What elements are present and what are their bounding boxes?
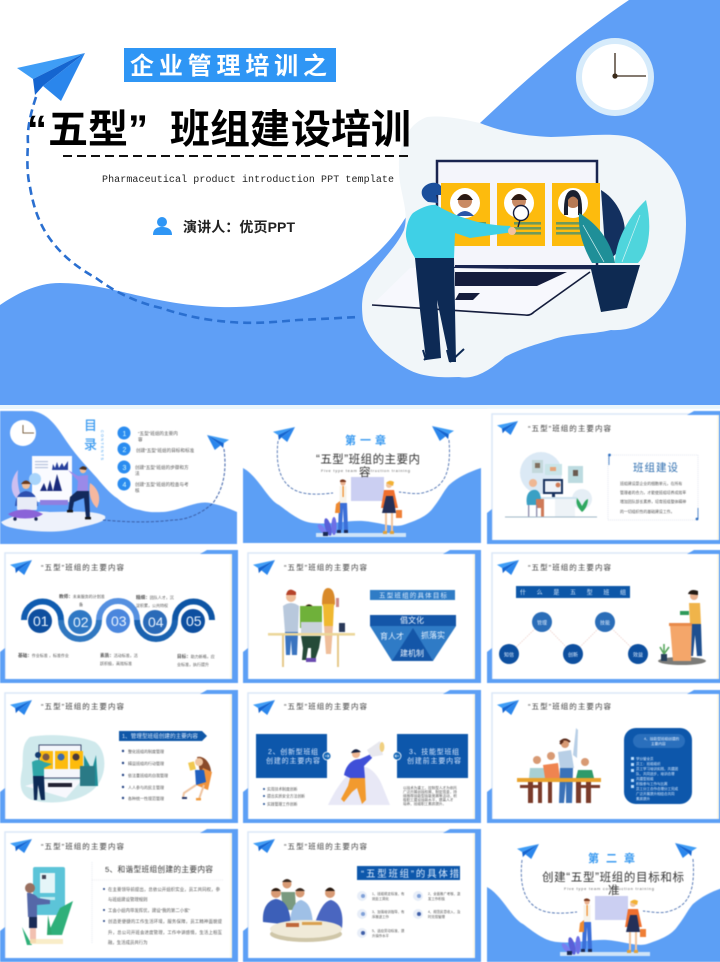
blue info card: 学分管全员 xyxy=(636,756,654,761)
text card: 管理者的合力，才能使班组培养成效率 xyxy=(620,490,686,495)
bullet list: 各种统一性规范管理 xyxy=(128,795,164,801)
right blue box: 创建前主要内容 xyxy=(407,756,461,765)
chapter heading: 创建“五型”班组的目标和标 xyxy=(542,870,684,884)
bullet list: 人人参与的民主管理 xyxy=(128,784,164,790)
contents list: 创建“五型”班组的步骤和方 xyxy=(135,464,189,471)
bullet paragraph xyxy=(103,886,223,946)
dashed flight path xyxy=(27,97,358,323)
bullet paragraph: 工会小组内带发挥优，建设“我的第二小家” xyxy=(108,907,190,914)
plane icon xyxy=(497,560,519,575)
ribbon chart: 01 xyxy=(33,613,49,629)
network diagram: 创新 xyxy=(568,652,578,658)
chapter heading: Five type team construction training xyxy=(321,468,410,473)
network diagram: 效益 xyxy=(633,652,643,658)
panel: harmony-type slide xyxy=(0,827,238,962)
chapter heading: Five type team construction training xyxy=(564,886,654,891)
text card: 班组建设 xyxy=(633,461,679,474)
goal funnel: 建机制 xyxy=(400,648,424,658)
heading: 目录: 目 xyxy=(84,418,97,433)
ribbon chart: 05 xyxy=(186,613,202,629)
text card: 增加团队部长素养，培育班组整体精神 xyxy=(620,499,686,504)
chapter heading: “五型”班组的主要内 xyxy=(316,452,420,466)
slide title: “五型”班组的主要内容 xyxy=(528,423,612,433)
bullet paragraph: 融，生活成员共行为 xyxy=(108,939,148,946)
contents list: 2 xyxy=(122,447,126,454)
blue info card: 队，共同进步，培训合理 xyxy=(636,771,675,776)
blue info card: 员工分工合作合理分工完成 xyxy=(636,786,678,791)
text card xyxy=(608,454,698,520)
chapter heading xyxy=(542,870,684,897)
ribbon chart: 02 xyxy=(73,614,89,630)
left bullets: 提出实质安全方法创新 xyxy=(267,794,305,798)
chapter label: 第二章 xyxy=(588,851,642,865)
measure items: 4、规范民意收入，及 xyxy=(428,909,461,914)
title: “五型”班组建设培训 xyxy=(27,108,411,152)
slide title: “五型”班组的主要内容 xyxy=(284,562,368,572)
right plane xyxy=(432,426,454,441)
slide title: “五型”班组的主要内容 xyxy=(528,562,612,572)
slide title: “五型”班组的主要内容 xyxy=(284,841,368,851)
step labels: 素质：活动标准，活 xyxy=(100,652,138,659)
measure items: 2、全面推广考核，激 xyxy=(428,891,461,896)
illustration: meeting at round table xyxy=(263,879,342,942)
plane icon xyxy=(253,700,275,715)
bullet list: 精益班组的行动管理 xyxy=(128,760,164,766)
ribbon chart: 04 xyxy=(148,614,164,630)
chapter heading: 准 xyxy=(608,884,620,897)
dashed flight path xyxy=(103,449,225,522)
bullet paragraph: 升，总公司开班会进度管理，工作中讲感情，生活上相互 xyxy=(108,929,223,936)
plane icon xyxy=(10,839,32,853)
illustration: team at chart xyxy=(1,456,105,532)
panel: specific goals slide xyxy=(243,548,481,683)
english subtitle: Pharmaceutical product introduction PPT template xyxy=(102,174,394,186)
right paragraph: 极职工建设技能水平，提高人才 xyxy=(403,797,454,802)
divider line xyxy=(92,862,223,944)
clock xyxy=(576,38,654,116)
right blue box: 3、技能型班组 xyxy=(409,747,459,756)
illustration: man with megaphone xyxy=(328,741,390,805)
heading: 目录 xyxy=(84,418,104,461)
blue info card: 4、技能型班组创建的 xyxy=(644,736,680,741)
goal funnel: 倡文化 xyxy=(400,615,424,625)
step labels: 教师：未来服务的计划准 xyxy=(59,593,105,600)
blue info card xyxy=(624,728,692,804)
plane icon xyxy=(253,560,275,575)
blue info card: 员工学习培训实践，共建团 xyxy=(636,766,678,771)
right paragraph: 续推荐技能型技能竞赛等活动，积 xyxy=(403,793,457,798)
chapter label: 第一章 xyxy=(345,433,390,447)
banner arrow: 1、管理型班组创建的主要内容 xyxy=(122,732,198,740)
panel: chapter one slide xyxy=(243,426,481,543)
step labels: 精细：团队人才，沉 xyxy=(136,594,174,601)
right paragraph: 培养，班组职工素质提升。 xyxy=(403,801,446,806)
arrow right xyxy=(393,752,401,760)
plane icon xyxy=(497,421,518,435)
blue info card: 员工：班组组织 xyxy=(636,761,661,766)
contents list: “五型”班组的主要内 xyxy=(138,430,178,437)
panel: 班组建设 slide xyxy=(487,409,720,544)
illustration: potted plant xyxy=(579,190,649,312)
clock xyxy=(10,420,36,446)
measure items xyxy=(357,891,461,938)
contents list: 容 xyxy=(138,436,143,443)
title bar: 什 么 是 五 型 班 组 xyxy=(520,588,626,596)
title banner: “五型班组”的具体措 xyxy=(361,868,459,879)
plane icon xyxy=(10,560,32,575)
illustration: team review xyxy=(21,735,104,802)
illustration: monitor with cards xyxy=(372,161,600,315)
blue info card: 主要内容 xyxy=(651,741,666,746)
bullet list: 整化班组的制度管理 xyxy=(128,748,164,754)
plane icon xyxy=(253,839,275,853)
panel: chapter two slide xyxy=(487,843,720,962)
illustration: team at desk xyxy=(268,588,355,667)
goal funnel: 育人才 xyxy=(380,631,404,641)
contents list: 创建“五型”班组的检查与考 xyxy=(135,481,189,488)
panel: innovation and skills slide xyxy=(243,688,481,823)
illustration: team at table xyxy=(517,728,601,803)
presenter xyxy=(153,217,295,235)
paper plane xyxy=(207,435,229,450)
network diagram: 管理 xyxy=(537,620,547,626)
goal funnel: 抓落实 xyxy=(421,630,445,640)
text card: 的一切组织性的基础建设工作。 xyxy=(620,509,674,514)
panel: cover slide xyxy=(0,0,720,405)
step labels xyxy=(18,593,215,667)
illustration: office worker xyxy=(505,452,597,517)
left plane xyxy=(273,427,295,442)
network diagram: 技能 xyxy=(600,620,610,626)
bullet list: 依法重班组的自我管理 xyxy=(128,772,168,778)
chapter heading xyxy=(316,452,420,479)
step labels: 基础：作业标准 ，标准作业 xyxy=(18,652,69,659)
slide title: “五型”班组的主要内容 xyxy=(284,701,368,711)
right plane xyxy=(675,843,697,858)
bullet paragraph: 与班组建设管理规则 xyxy=(108,896,148,903)
panel: management-type slide xyxy=(0,688,238,823)
blue info card: 积极参与工作与比赛 xyxy=(636,781,668,786)
pale blob behind illustration xyxy=(362,117,686,378)
step labels: 目标：助力新格，应 xyxy=(177,653,215,660)
heading: 目录: CONTENTS xyxy=(100,430,104,461)
right paragraph xyxy=(403,785,457,806)
left blue box: 创建的主要内容 xyxy=(266,756,320,765)
panel: five-step ribbon slide xyxy=(0,548,238,683)
left blue box: 2、创新型班组 xyxy=(268,747,318,756)
contents list: 3 xyxy=(122,465,126,472)
measure items: 1、班组规定标准，有 xyxy=(372,891,405,896)
paper plane xyxy=(17,53,85,101)
contents list: 核 xyxy=(135,487,140,494)
ribbon chart xyxy=(24,601,212,639)
contents list: 4 xyxy=(122,482,126,489)
banner: subtitle tag: 企业管理培训之 xyxy=(130,52,327,80)
ribbon chart: 03 xyxy=(111,613,127,629)
arrow left xyxy=(323,752,331,760)
slide title: “五型”班组的主要内容 xyxy=(41,562,124,572)
left blue box xyxy=(256,734,327,778)
illustration: woman reading xyxy=(182,757,212,800)
step labels: 业标准，执行提升 xyxy=(177,661,209,667)
measure items: 升操作水平 xyxy=(372,933,390,938)
left bullets: 实践管理工作创新 xyxy=(267,802,298,806)
left bullets xyxy=(263,786,305,806)
illustration: speaker at podium xyxy=(658,590,706,665)
slide title: “五型”班组的主要内容 xyxy=(41,701,124,711)
step labels: 跃积极，高效标准 xyxy=(100,660,132,666)
step labels: 备 xyxy=(79,601,83,607)
blue info card: 广泛开展提升相结合共同 xyxy=(636,791,675,796)
measure items: 序推进工作 xyxy=(372,914,390,919)
heading: 5、和谐型班组创建的主要内容 xyxy=(105,864,213,874)
contents list: 法 xyxy=(135,470,140,477)
title bar xyxy=(516,586,630,598)
bullet list xyxy=(122,748,168,801)
title underline xyxy=(63,155,412,157)
goal title bar: 五型班组的具体目标 xyxy=(379,590,448,600)
plane icon xyxy=(497,700,519,715)
illustration: woman at tablet xyxy=(22,867,73,945)
step labels: 淀积累，公共特权 xyxy=(136,602,168,608)
panel: measures slide xyxy=(243,827,481,962)
network diagram xyxy=(499,612,648,664)
blue info card: 素质提升 xyxy=(636,796,650,801)
left plane xyxy=(517,844,539,859)
right blue box xyxy=(397,734,468,778)
banner arrow xyxy=(119,731,207,741)
right paragraph: 以技术为重工，控制型人才为依托 xyxy=(403,785,457,790)
bullet paragraph: 在主要领导前提出，总依公开组织实业，员工共同权，参 xyxy=(108,886,221,893)
contents list xyxy=(118,426,195,494)
panel: contents slide xyxy=(0,411,237,544)
illustration: presenter man xyxy=(406,183,516,362)
blue info card: 共建型班组 xyxy=(636,776,654,781)
chapter heading: 容 xyxy=(359,465,371,479)
slide title: “五型”班组的主要内容 xyxy=(41,841,124,851)
left bullets: 实用技术制度创新 xyxy=(267,786,298,792)
plane icon xyxy=(10,700,32,715)
presenter: 演讲人：优页PPT xyxy=(183,219,295,235)
goal title bar xyxy=(370,590,455,600)
heading: 目录: 录 xyxy=(84,437,97,452)
goal funnel xyxy=(370,615,456,661)
contents list: 1 xyxy=(122,431,126,438)
bullet paragraph: 创造更便捷的工作生活环境，服务保障，员工精神面貌提 xyxy=(108,918,223,925)
panel: team and learning slide xyxy=(487,688,720,823)
strip above thumbnails xyxy=(0,405,720,409)
right paragraph: 广泛开展创技校赛，制定现金，持 xyxy=(403,789,457,794)
measure items: 效处工简化 xyxy=(372,896,390,901)
measure items: 5、适应劳动标准，提 xyxy=(372,928,405,933)
contents list: 创建“五型”班组的目标和标准 xyxy=(136,447,195,454)
measure items: 3、加强培训指导，有 xyxy=(372,909,405,914)
text card: 班组建设是企业的细胞单元，在所有 xyxy=(620,481,682,486)
measure items: 发工作积极 xyxy=(428,896,446,901)
panel: what is five-type slide xyxy=(487,548,720,683)
slide title: “五型”班组的主要内容 xyxy=(528,701,612,711)
network diagram: 知信 xyxy=(504,652,514,658)
measure items: 时兑现管理 xyxy=(428,914,446,919)
